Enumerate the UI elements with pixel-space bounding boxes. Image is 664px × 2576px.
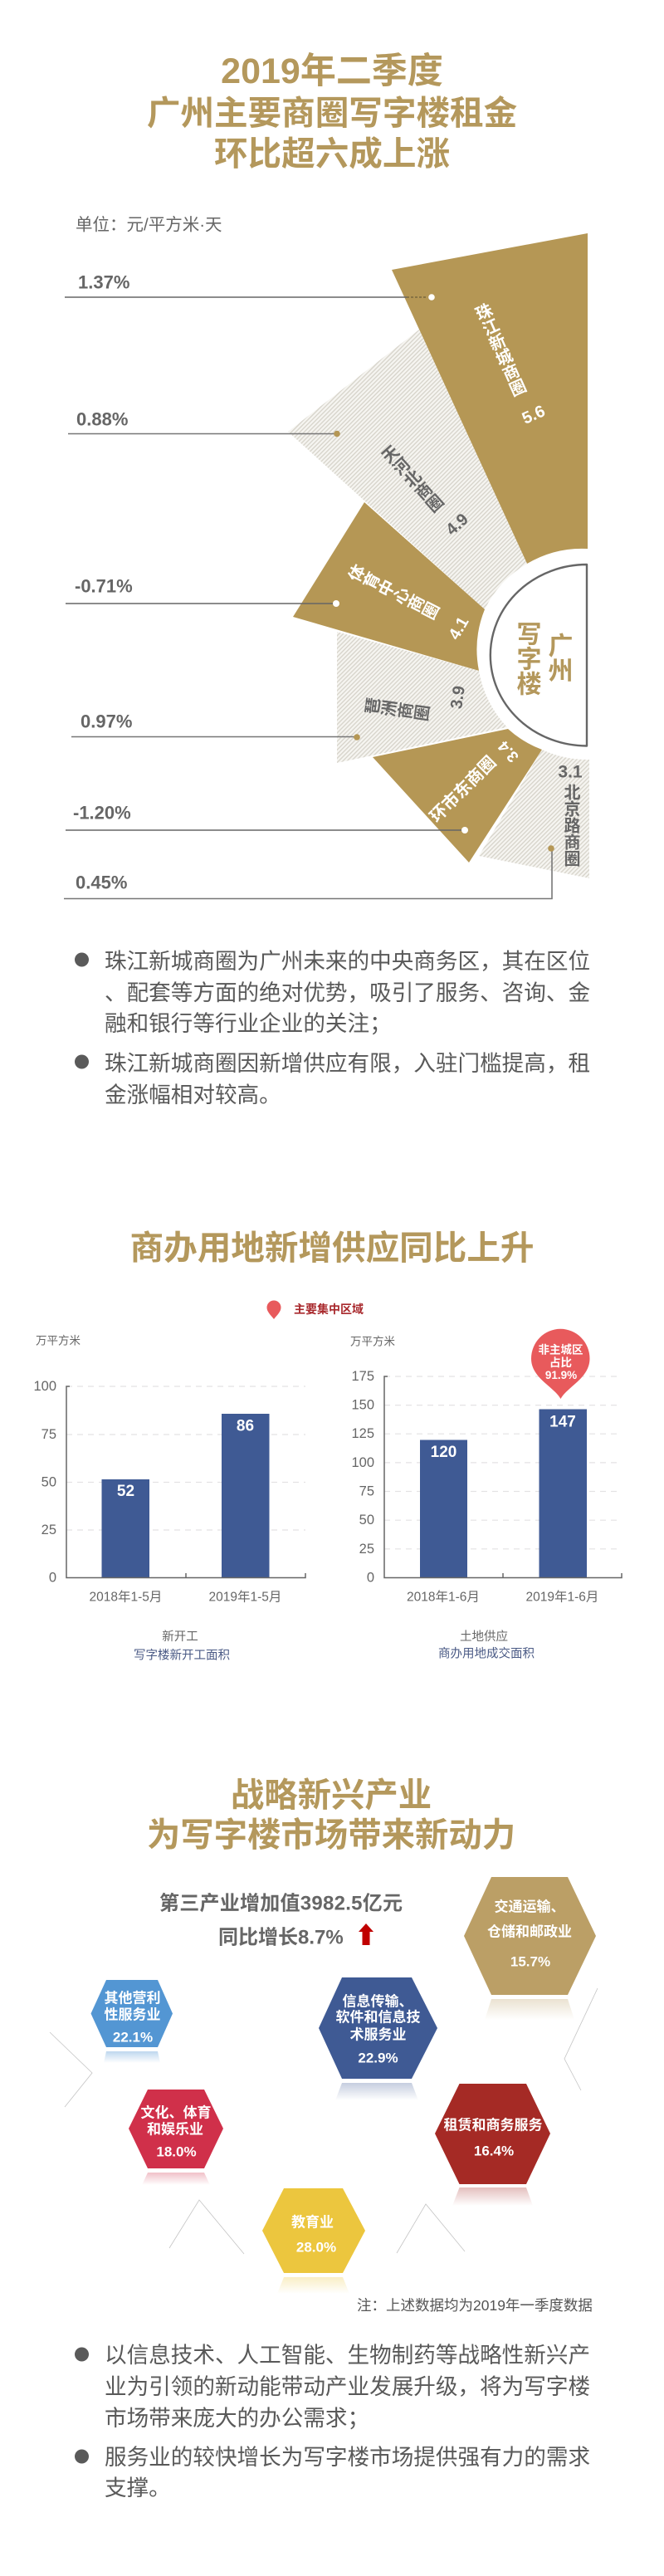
bar: 2018 land supply: 120 xyxy=(431,1444,456,1461)
text block: Zhujiang New Town notes: 金涨幅相对较高。 xyxy=(105,1083,281,1107)
hexagon: transport and logistics xyxy=(464,1877,596,2020)
hexagon: other for-profit services: 22.1% xyxy=(113,2029,153,2046)
bar: 2019 new construction: 86 xyxy=(237,1418,254,1435)
note: data period: 注：上述数据均为2019年一季度数据 xyxy=(357,2297,593,2314)
bar chart: new construction: 2019年1-5月 xyxy=(209,1589,281,1604)
wedge: Huanshi East xyxy=(373,729,542,863)
text block: emerging industries notes: 支撑。 xyxy=(105,2476,171,2500)
legend: main concentration area: 主要集中区域 xyxy=(294,1303,364,1316)
hexagon: education: 教育业 xyxy=(291,2213,334,2230)
stat: tertiary industry added value: 同比增长8.7% xyxy=(218,1926,344,1949)
wedge: Zhujiang New Town: 5.6 xyxy=(520,402,548,428)
wedge: Huanshi East: 环市东商圈 xyxy=(426,752,500,826)
callout: 0.45% xyxy=(64,845,554,898)
center: Guangzhou office label: 广州 xyxy=(544,633,573,682)
wedge: Tianhe North: 天河北商圈 xyxy=(376,442,446,517)
bar: 2019 land supply: 147 xyxy=(549,1413,576,1431)
wedge: Sports Center xyxy=(293,502,485,671)
text block: emerging industries notes: 市场带来庞大的办公需求； xyxy=(105,2406,369,2431)
bar chart: new construction: 0 xyxy=(49,1571,56,1586)
stat: tertiary industry added value xyxy=(159,1893,403,1949)
bar chart: land supply xyxy=(350,1335,622,1604)
hexagon: transport and logistics: 15.7% xyxy=(510,1954,550,1969)
legend: main concentration area xyxy=(267,1300,364,1319)
callout pin: non-core districts share: 占比 xyxy=(549,1356,572,1369)
wedge: Beijing Road xyxy=(479,750,589,878)
text block: emerging industries notes xyxy=(75,2343,590,2500)
bar chart: new construction: 2018年1-5月 xyxy=(90,1589,162,1604)
text block: emerging industries notes: 以信息技术、人工智能、生物制药等战略性新兴产 xyxy=(105,2343,590,2368)
wedge: Pazhou: 3.9 xyxy=(447,685,469,710)
wedge: Pazhou: 琶洲商圈 xyxy=(363,697,431,725)
callout pin: non-core districts share: 91.9% xyxy=(545,1369,577,1381)
wedge: Pazhou xyxy=(337,632,507,763)
bar: 2019 new construction xyxy=(222,1414,269,1577)
hexagon: leasing and business services: 租赁和商务服务 xyxy=(443,2117,543,2134)
text block: Zhujiang New Town notes xyxy=(75,949,590,1107)
heading: strategic emerging industries: 战略新兴产业 xyxy=(231,1776,432,1814)
bar chart: new construction: 万平方米 xyxy=(36,1335,81,1347)
wedge: Beijing Road: 3.1 xyxy=(558,762,583,782)
callout: 0.97%: 0.97% xyxy=(81,711,132,732)
callout: 0.97% xyxy=(71,711,360,741)
wedge: Beijing Road: 北京路商圈 xyxy=(561,784,580,867)
caption: land supply: 土地供应 xyxy=(460,1629,508,1644)
callout: 0.45%: 0.45% xyxy=(76,872,127,893)
title: rent heading: 2019年二季度 xyxy=(221,51,443,91)
callout: -1.20% xyxy=(66,802,468,833)
text block: Zhujiang New Town notes: 融和银行等行业企业的关注； xyxy=(105,1011,392,1036)
bar chart: land supply: 175 xyxy=(351,1369,374,1384)
bar chart: new construction: 50 xyxy=(42,1474,56,1489)
hexagon: information technology services: 22.9% xyxy=(358,2051,398,2065)
hexagon: culture sports entertainment xyxy=(129,2090,223,2185)
stat: tertiary industry added value: 第三产业增加值3982.5亿元 xyxy=(159,1893,403,1914)
bar chart: land supply: 150 xyxy=(351,1398,374,1413)
bar chart: land supply: 0 xyxy=(367,1571,374,1586)
caption: new construction: 写字楼新开工面积 xyxy=(134,1649,230,1662)
callout pin: non-core districts share: 非主城区 xyxy=(538,1343,583,1356)
caption: new construction xyxy=(134,1630,230,1662)
bar chart: land supply: 2018年1-6月 xyxy=(407,1589,480,1604)
text block: Zhujiang New Town notes: 珠江新城商圈为广州未来的中央商务区，其在区位 xyxy=(105,949,590,974)
title: rent heading: 广州主要商圈写字楼租金 xyxy=(147,94,517,132)
hexagon: information technology services: 信息传输、 xyxy=(342,1992,413,2009)
hexagon: transport and logistics: 交通运输、 xyxy=(495,1898,564,1914)
text block: emerging industries notes: 业为引领的新动能带动产业发展升级，将为写字楼 xyxy=(105,2374,590,2399)
hexagon: information technology services xyxy=(319,1977,437,2100)
center: Guangzhou office label: 写字楼 xyxy=(513,621,541,696)
callout: -0.71%: -0.71% xyxy=(75,576,133,596)
wedge: Huanshi East: 3.4 xyxy=(495,737,523,765)
radial chart: Guangzhou office rents by business district xyxy=(288,233,589,878)
center: Guangzhou office label xyxy=(491,565,587,745)
bar: 2018 new construction xyxy=(101,1479,149,1577)
bar: 2019 land supply xyxy=(540,1410,587,1577)
bar chart: land supply: 125 xyxy=(351,1426,374,1441)
callout: 0.88% xyxy=(68,408,340,437)
wedge: Sports Center: 4.1 xyxy=(446,613,472,643)
caption: land supply xyxy=(438,1629,535,1660)
hexagon: information technology services: 软件和信息技 xyxy=(335,2009,420,2026)
callout: 1.37%: 1.37% xyxy=(78,272,129,292)
hexagon: culture sports entertainment: 和娱乐业 xyxy=(147,2122,203,2137)
bar chart: land supply: 100 xyxy=(351,1455,374,1470)
hexagon: other for-profit services: 性服务业 xyxy=(105,2007,161,2022)
callout pin: non-core districts share xyxy=(531,1329,589,1399)
wedge: Sports Center: 体育中心商圈 xyxy=(344,562,442,624)
bar chart: new construction: 75 xyxy=(42,1427,56,1442)
bar chart: land supply: 75 xyxy=(359,1484,374,1499)
text block: Zhujiang New Town notes: 、配套等方面的绝对优势，吸引了服务、咨询、金 xyxy=(105,980,590,1005)
hexagon: information technology services: 术服务业 xyxy=(350,2027,407,2042)
unit label: 单位：元/平方米·天 xyxy=(76,216,222,234)
heading: new supply: 商办用地新增供应同比上升 xyxy=(130,1229,534,1267)
bar chart: land supply: 万平方米 xyxy=(350,1335,395,1348)
hexagon: culture sports entertainment: 文化、体育 xyxy=(141,2104,211,2120)
text block: Zhujiang New Town notes: 珠江新城商圈因新增供应有限，入驻门槛提高，租 xyxy=(105,1051,590,1076)
callout: -0.71% xyxy=(66,576,339,607)
bar chart: land supply: 50 xyxy=(359,1513,374,1528)
hexagon: other for-profit services: 其他营利 xyxy=(105,1991,161,2006)
text block: emerging industries notes: 服务业的较快增长为写字楼市场提供强有力的需求 xyxy=(105,2445,590,2470)
hexagon: culture sports entertainment: 18.0% xyxy=(156,2143,197,2160)
decorative chevrons xyxy=(50,1988,598,2254)
hexagon: other for-profit services xyxy=(91,1980,173,2063)
hexagon: transport and logistics: 仓储和邮政业 xyxy=(487,1923,572,1939)
icon: up arrow xyxy=(359,1923,374,1945)
hexagon: education: 28.0% xyxy=(296,2240,336,2255)
caption: land supply: 商办用地成交面积 xyxy=(438,1645,535,1660)
bar chart: new construction: 100 xyxy=(33,1379,56,1394)
bar chart: new construction: 25 xyxy=(42,1523,56,1537)
bar: 2018 new construction: 52 xyxy=(117,1483,134,1500)
title: rent heading: 环比超六成上涨 xyxy=(214,134,450,173)
callout: -1.20%: -1.20% xyxy=(73,802,131,824)
bar: 2018 land supply xyxy=(420,1440,467,1577)
hexagon: leasing and business services xyxy=(435,2084,550,2206)
title: rent heading xyxy=(147,51,517,173)
callout: 1.37% xyxy=(65,272,435,301)
wedge: Tianhe North xyxy=(288,330,527,609)
wedge: Zhujiang New Town xyxy=(392,233,588,564)
callout: 0.88%: 0.88% xyxy=(76,408,128,430)
heading: strategic emerging industries: 为写字楼市场带来新动力 xyxy=(147,1816,515,1854)
bar chart: land supply: 25 xyxy=(359,1542,374,1557)
wedge: Tianhe North: 4.9 xyxy=(442,511,472,539)
wedge: Zhujiang New Town: 珠江新城商圈 xyxy=(470,301,528,399)
bar chart: new construction xyxy=(33,1335,305,1604)
caption: new construction: 新开工 xyxy=(162,1630,198,1644)
hexagon: education xyxy=(262,2188,365,2294)
heading: strategic emerging industries xyxy=(147,1776,515,1854)
bar chart: land supply: 2019年1-6月 xyxy=(526,1589,598,1604)
hexagon: leasing and business services: 16.4% xyxy=(474,2143,514,2158)
